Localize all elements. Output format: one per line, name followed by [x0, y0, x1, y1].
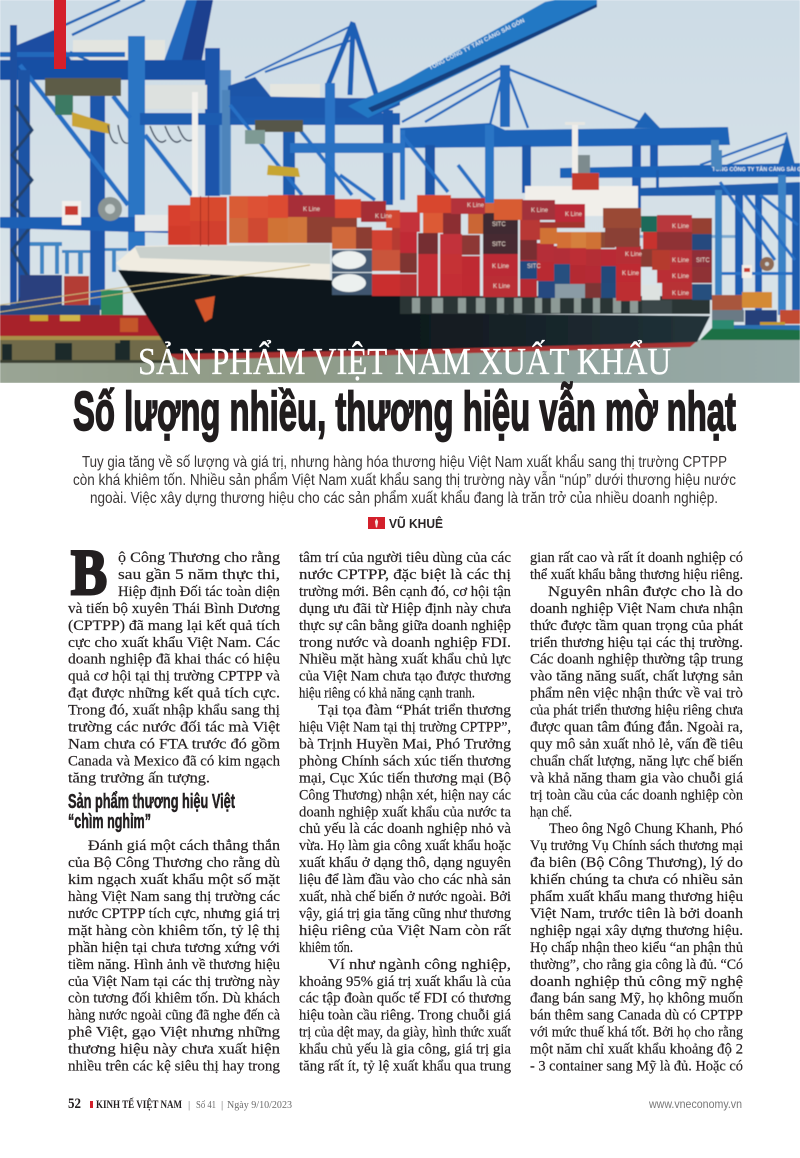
crane 1 diagonal braces — [20, 65, 192, 205]
column 1 text: kim ngạch xuất khẩu một số mặt — [68, 871, 281, 888]
column 3 text: triển thương hiệu tại các thị trường. — [530, 634, 743, 651]
column 1 text: và tiến bộ xuyên Thái Bình Dương — [68, 600, 280, 617]
column 2 text: nước CPTPP, đặc biệt là các thị — [299, 566, 511, 583]
column 1 text: của Việt Nam tại các thị trường này — [68, 973, 280, 990]
issue and date: Ngày 9/10/2023 — [227, 1099, 292, 1111]
column 1 text: tiềm năng. Hình ảnh về thương hiệu — [68, 956, 280, 973]
column 3 text: Họ chấp nhận theo kiểu “an phận thủ — [530, 939, 743, 956]
column 3 text: đa biên (Bộ Công Thương), lý do — [530, 854, 743, 871]
containers: centre stack — [400, 195, 658, 301]
column 1 text: quả cơ hội tại thị trường CPTPP và — [68, 668, 280, 685]
standfirst: ngoài. Việc xây dựng thương hiệu cho các sản phẩm xuất khẩu đang là trăn trở của nhiều doanh nghiệp. — [90, 489, 718, 507]
footer red marker — [90, 1101, 93, 1108]
column 1 text: mặt hàng còn khiêm tốn, tỷ lệ thị — [68, 922, 280, 939]
column 3 text: và khả năng tham gia vào chuỗi giá — [530, 769, 743, 786]
crane 2 beam — [230, 96, 400, 114]
crane 2 diagonals — [230, 105, 375, 200]
column 2 text: Ví như ngành công nghiệp, — [328, 956, 511, 973]
column 3 text: được quan tâm đúng đắn. Ngoài ra, — [530, 718, 743, 736]
column 3 text: trị toàn cầu của các doanh nghiệp còn — [530, 786, 743, 803]
issue and date: | — [221, 1099, 223, 1111]
column 1 text: cực cho xuất khẩu Việt Nam. Các — [68, 634, 280, 651]
column 2 text: tăng rất ít, tỷ lệ xuất khẩu qua trung — [299, 1058, 511, 1074]
column 2 text: bà Trịnh Huyền Mai, Phó Trưởng — [299, 736, 511, 752]
crane 2 lower beam — [290, 143, 400, 153]
column 1 text: Trong đó, xuất nhập khẩu sang thị — [68, 702, 280, 719]
crane 1 trolley — [45, 78, 121, 96]
green tugboat — [700, 328, 800, 340]
ship superstructure — [525, 186, 638, 216]
kicker headline: SẢN PHẨM VIỆT NAM XUẤT KHẨU — [138, 340, 671, 383]
column 3 text: nghiệp ngại xây dựng thương hiệu. — [530, 922, 743, 939]
column 3 text: vào tăng năng suất, chất lượng sản — [530, 668, 743, 685]
column 2 text: vừa. Họ làm gia công xuất khẩu hoặc — [299, 837, 511, 854]
issue and date: | — [188, 1099, 190, 1111]
containers: right stack — [642, 215, 712, 314]
column 1 text: đạt được những kết quả tích cực. — [68, 685, 280, 702]
drop cap: B — [71, 537, 107, 609]
quay wall — [0, 339, 168, 361]
column 3 text: với mức thuế khá tốt. Bởi họ cho rằng — [530, 1024, 743, 1041]
containers: right stack: K Line — [672, 274, 690, 280]
sign and wheel — [62, 201, 81, 225]
subheading — [68, 791, 235, 833]
column 2 text: Nhiều mặt hàng xuất khẩu chủ lực — [299, 651, 511, 668]
column 1 text: trường các nước đối tác mà Việt — [68, 718, 281, 736]
column 1 text: (CPTPP) đã mang lại kết quả tích — [68, 617, 280, 634]
crane 2 house — [270, 84, 320, 98]
containers: centre stack: K Line — [622, 271, 640, 277]
column 2 text: các tập đoàn quốc tế FDI có thương — [299, 990, 511, 1007]
containers: right stack: K Line — [672, 224, 690, 230]
crane 1 boom cables — [65, 0, 145, 64]
byline: VŨ KHUÊ — [389, 516, 443, 531]
crane 1 boom — [164, 0, 212, 61]
crane 2 A-frame — [328, 22, 378, 100]
column 2 text: dụng ưu đãi từ Hiệp định này chưa — [299, 600, 511, 617]
column 1 text: phần hiện tại chưa tương xứng với — [68, 939, 280, 956]
containers: left stack — [168, 195, 400, 296]
column 1 text: thương hiệu này chưa xuất hiện — [68, 1041, 280, 1058]
containers: centre stack: K Line — [531, 208, 549, 214]
sign and coil right — [742, 265, 752, 278]
containers: right stack: K Line — [672, 258, 690, 264]
far-right yard containers — [712, 295, 742, 310]
column 2 text: khoảng 95% giá trị xuất khẩu là của — [299, 973, 511, 990]
column 2 text: hiệu riêng có khả năng cạnh tranh. — [299, 685, 475, 702]
column 2 text: mại, Cục Xúc tiến thương mại (Bộ — [299, 769, 511, 786]
column 1 text: hàng nước ngoài cũng đã nghe đến cà — [68, 1007, 280, 1024]
background cranes and yard, far distance — [22, 235, 740, 274]
standfirst — [73, 453, 736, 507]
column 1 text: doanh nghiệp đã khai thác có hiệu — [68, 651, 280, 668]
column 3 text: - 3 container sang Mỹ là đủ. Hoặc có — [530, 1058, 743, 1074]
byline — [368, 516, 443, 531]
crane 1 lower beam — [0, 217, 168, 233]
containers: centre stack: K Line — [467, 203, 485, 209]
containers: centre stack: K Line — [565, 212, 583, 218]
column 1 text: sau gần 5 năm thực thi, — [118, 566, 280, 583]
column 1 text: tăng trưởng ấn tượng. — [68, 769, 210, 786]
column 2 text: khiêm tốn. — [299, 939, 353, 956]
containers: left stack: K Line — [375, 214, 393, 220]
column 2 text: trong nước và doanh nghiệp FDI. — [299, 634, 511, 651]
deck pillars — [400, 296, 710, 314]
column 2 text: hiệu Việt Nam tại thị trường CPTPP”, — [299, 718, 511, 736]
column 1 text: của Bộ Công Thương cho rằng dù — [68, 854, 280, 871]
column 3 text: doanh nghiệp Việt Nam chưa nhận — [530, 600, 743, 617]
containers: centre stack: SITC — [492, 222, 506, 228]
containers: centre stack: SITC — [527, 264, 541, 270]
column 1 text: còn tương đối khiêm tốn. Dù khách — [68, 990, 280, 1007]
crane 1: left machinery house — [73, 40, 165, 62]
column 1 text: Hiệp định Đối tác toàn diện — [118, 583, 280, 600]
column 2 text: thực sự cân bằng giữa doanh nghiệp — [299, 617, 511, 634]
issue and date — [188, 1099, 292, 1111]
column 2 text: trị của dệt may, da giày, hình thức xuất — [299, 1024, 512, 1041]
crane 2 cables — [245, 25, 353, 78]
containers: right stack: SITC — [696, 258, 710, 264]
column 2 text: Công Thương) nhận xét, hiện nay các — [299, 786, 511, 803]
magazine name: KINH TẾ VIỆT NAM — [96, 1096, 182, 1111]
column 3 text: đang bán sang Mỹ, họ không muốn — [530, 990, 743, 1007]
column 2 text: khẩu chủ yếu là gia công, giá trị gia — [299, 1041, 511, 1058]
column 1 text: phê Việt, gạo Việt nhưng những — [68, 1024, 280, 1041]
column 1 text: Canada và Mexico đã có kim ngạch — [68, 752, 280, 769]
footer — [68, 1096, 742, 1112]
column 3 text: thể xuất khẩu bằng thương hiệu riêng. — [530, 566, 743, 583]
column 3 text: Theo ông Ngô Chung Khanh, Phó — [549, 820, 743, 837]
column 3 text: một năm chỉ xuất khẩu khoảng độ 2 — [530, 1041, 743, 1058]
column 2 text: của Việt Nam chưa tạo được thương — [299, 668, 511, 685]
subheading: Sản phẩm thương hiệu Việt — [68, 791, 235, 813]
crane 4 right — [700, 133, 787, 168]
column 3 text: hạn chế. — [530, 803, 572, 820]
containers: centre stack: K Line — [492, 264, 510, 270]
column 1 text: Nam chưa có FTA trước đó gồm — [68, 736, 280, 752]
column 2 text: hiệu toàn cầu riêng. Trong chuỗi giá — [299, 1007, 511, 1024]
crane 3 — [402, 66, 640, 128]
column 3 text: Việt Nam, trước tiên là bởi doanh — [530, 905, 743, 922]
column 3 text: Vụ trưởng Vụ Chính sách thương mại — [530, 837, 743, 854]
column 2 text — [299, 549, 512, 1074]
crane 2 legs — [325, 83, 335, 198]
crane 1 dark top — [15, 30, 72, 64]
containers: centre stack: SITC — [492, 242, 506, 248]
subheading: “chìm nghỉm” — [68, 811, 151, 833]
column 2 text: trường mới. Bên cạnh đó, cơ hội tận — [299, 583, 511, 600]
port quay machinery left — [20, 275, 62, 310]
containers: centre stack: K Line — [625, 252, 643, 258]
containers: right stack: K Line — [672, 291, 690, 297]
column 2 text: vậy, giá trị gia tăng cũng như thương — [299, 905, 511, 922]
column 3 text: của phát triển thương hiệu riêng chưa — [530, 702, 743, 719]
issue and date: Số 41 — [196, 1099, 216, 1111]
column 3 text: khiến chúng ta chưa có nhiều sản — [530, 871, 743, 888]
column 2 text: liệu để làm đầu vào cho các nhà sản — [299, 871, 511, 888]
ship emblem and mooring ropes — [195, 296, 215, 322]
column 3 text: doanh nghiệp thủ công mỹ nghệ — [530, 973, 743, 990]
column 1 text: Đánh giá một cách thẳng thắn — [88, 837, 280, 854]
column 1 text: nhiều trên các kệ siêu thị hay trong — [68, 1058, 280, 1074]
column 3 text: gian rất cao và rất ít doanh nghiệp có — [530, 549, 743, 566]
column 3 text — [530, 549, 744, 1074]
column 2 text: phòng Chính sách xúc tiến thương — [299, 752, 511, 769]
column 2 text: chủ yếu là các doanh nghiệp nhỏ và — [299, 820, 511, 837]
column 2 text: hiệu riêng của Việt Nam còn rất — [299, 922, 512, 939]
column 1 text: nước CPTPP tích cực, nhưng giá trị — [68, 905, 280, 922]
column 2 text: doanh nghiệp xuất khẩu của nước ta — [299, 803, 511, 820]
icon: byline red square — [368, 517, 385, 529]
column 2 text: tâm trí của người tiêu dùng của các — [299, 549, 511, 566]
column 1 text: ộ Công Thương cho rằng — [118, 549, 280, 566]
crane 2 dark head — [228, 77, 272, 100]
column 3 text: bán thêm sang Canada dù có CPTPP — [530, 1007, 743, 1024]
crane 1 stair tower — [10, 25, 17, 345]
column 3 text: chuẩn chất lượng, năng lực chế biến — [530, 752, 743, 769]
column 3 text: thường”, cho rằng gia công là đủ. “Có — [530, 956, 743, 973]
crane 1 girder — [0, 60, 215, 80]
column 3 text: thức được tầm quan trọng của phát — [530, 617, 744, 634]
column 3 text: Các doanh nghiệp thường tập trung — [530, 651, 743, 668]
column 3 text: phẩm nên việc nhận thức về vai trò — [530, 685, 743, 702]
column 2 text: xuất khẩu ở dạng thô, dạng nguyên — [299, 854, 511, 871]
hero photo: container ship at port with blue cranes: TỔNG CÔNG TY TÂN CẢNG SÀI GÒN — [427, 16, 526, 72]
column 1 text: hàng Việt Nam sang thị trường các — [68, 888, 280, 905]
column 2 text: Tại tọa đàm “Phát triển thương — [318, 702, 511, 719]
column 1 text — [68, 549, 281, 1074]
ship hull with cream deck and boot stripe — [116, 244, 330, 282]
column 3 text: phẩm xuất khẩu mang thương hiệu — [530, 888, 743, 905]
crane 2 trolley and spreader — [255, 120, 303, 132]
column 2 text: xuất, nhà chế biến ở nước ngoài. Bởi — [299, 888, 511, 905]
page number: 52 — [68, 1096, 81, 1112]
column 3 text: Nguyên nhân được cho là do — [548, 583, 743, 600]
column 3 text: quy mô sản xuất nhỏ lẻ, vấn đề tiêu — [530, 736, 743, 752]
crane 1 legs — [90, 95, 105, 310]
website: www.vneconomy.vn — [648, 1099, 742, 1111]
containers: left stack: K Line — [303, 207, 321, 213]
crane 2 boom — [348, 0, 597, 118]
containers: centre stack: K Line — [493, 284, 511, 290]
hero photo: container ship at port with blue cranes — [0, 0, 800, 383]
red accent bar — [54, 0, 66, 69]
